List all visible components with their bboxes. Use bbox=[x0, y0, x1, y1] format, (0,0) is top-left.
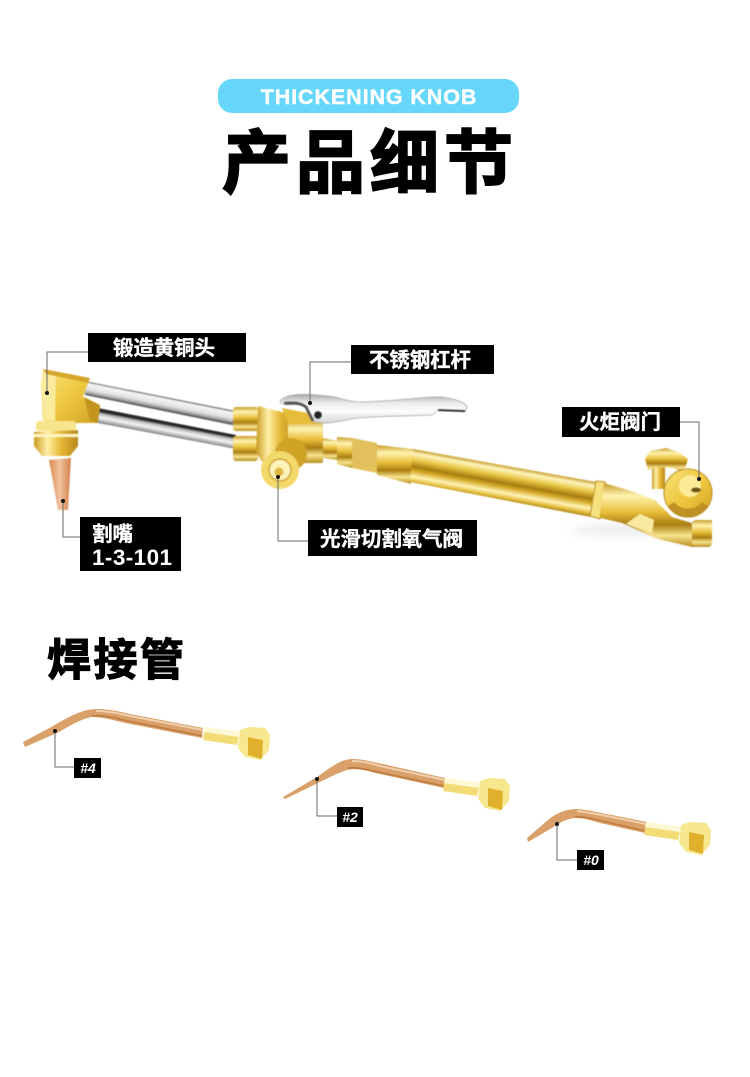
torch valve assembly bbox=[600, 448, 712, 547]
nozzle nut bbox=[34, 421, 78, 456]
welding tip #4: #4 bbox=[80, 760, 96, 776]
section heading: 焊接管: 焊接管 bbox=[47, 624, 184, 688]
upper chrome tube bbox=[85, 381, 236, 426]
title: 产品细节 bbox=[222, 107, 513, 207]
copper pipe bbox=[23, 709, 203, 747]
callout: 锻造黄铜头: 锻造黄铜头 bbox=[113, 331, 215, 361]
lower chrome tube bbox=[98, 408, 236, 449]
callout: 火炬阀门 bbox=[562, 405, 701, 481]
welding tip #2: #2 bbox=[342, 809, 358, 825]
welding tip #0: #0 bbox=[583, 852, 599, 868]
heading pill: THICKENING KNOB: THICKENING KNOB bbox=[261, 85, 477, 109]
cutting torch illustration bbox=[34, 369, 712, 547]
copper pipe bbox=[283, 759, 445, 799]
callout: 光滑切割氧气阀 bbox=[276, 475, 477, 556]
brass valve body bbox=[233, 406, 323, 463]
brass fitting bbox=[443, 778, 510, 811]
brass fitting bbox=[203, 727, 270, 760]
callout: 不锈钢杠杆 bbox=[308, 343, 494, 405]
brass collar bbox=[590, 481, 605, 519]
stainless steel lever bbox=[280, 394, 467, 423]
welding tip #2 bbox=[283, 759, 510, 827]
oxygen valve knob bbox=[261, 438, 307, 489]
brass coupling bbox=[323, 437, 413, 484]
brass fitting bbox=[644, 822, 711, 855]
callout: 光滑切割氧气阀: 光滑切割氧气阀 bbox=[320, 522, 463, 552]
callout: 锻造黄铜头 bbox=[45, 331, 246, 395]
copper pipe bbox=[527, 809, 647, 842]
long brass tube bbox=[410, 449, 596, 517]
callout: 割嘴 1-3-101: 1-3-101 bbox=[92, 545, 172, 570]
callout: 割嘴 1-3-101: 割嘴 bbox=[92, 517, 133, 547]
callout: 不锈钢杠杆: 不锈钢杠杆 bbox=[369, 343, 471, 373]
callout: 割嘴 1-3-101 bbox=[61, 499, 181, 571]
callout: 火炬阀门: 火炬阀门 bbox=[579, 405, 661, 435]
welding tip #0 bbox=[527, 809, 711, 870]
forged brass head bbox=[41, 369, 100, 424]
welding tip #4 bbox=[23, 709, 270, 778]
heading pill: THICKENING KNOB bbox=[218, 79, 519, 113]
copper cutting tip bbox=[49, 458, 71, 510]
torch shadow bbox=[570, 525, 710, 535]
